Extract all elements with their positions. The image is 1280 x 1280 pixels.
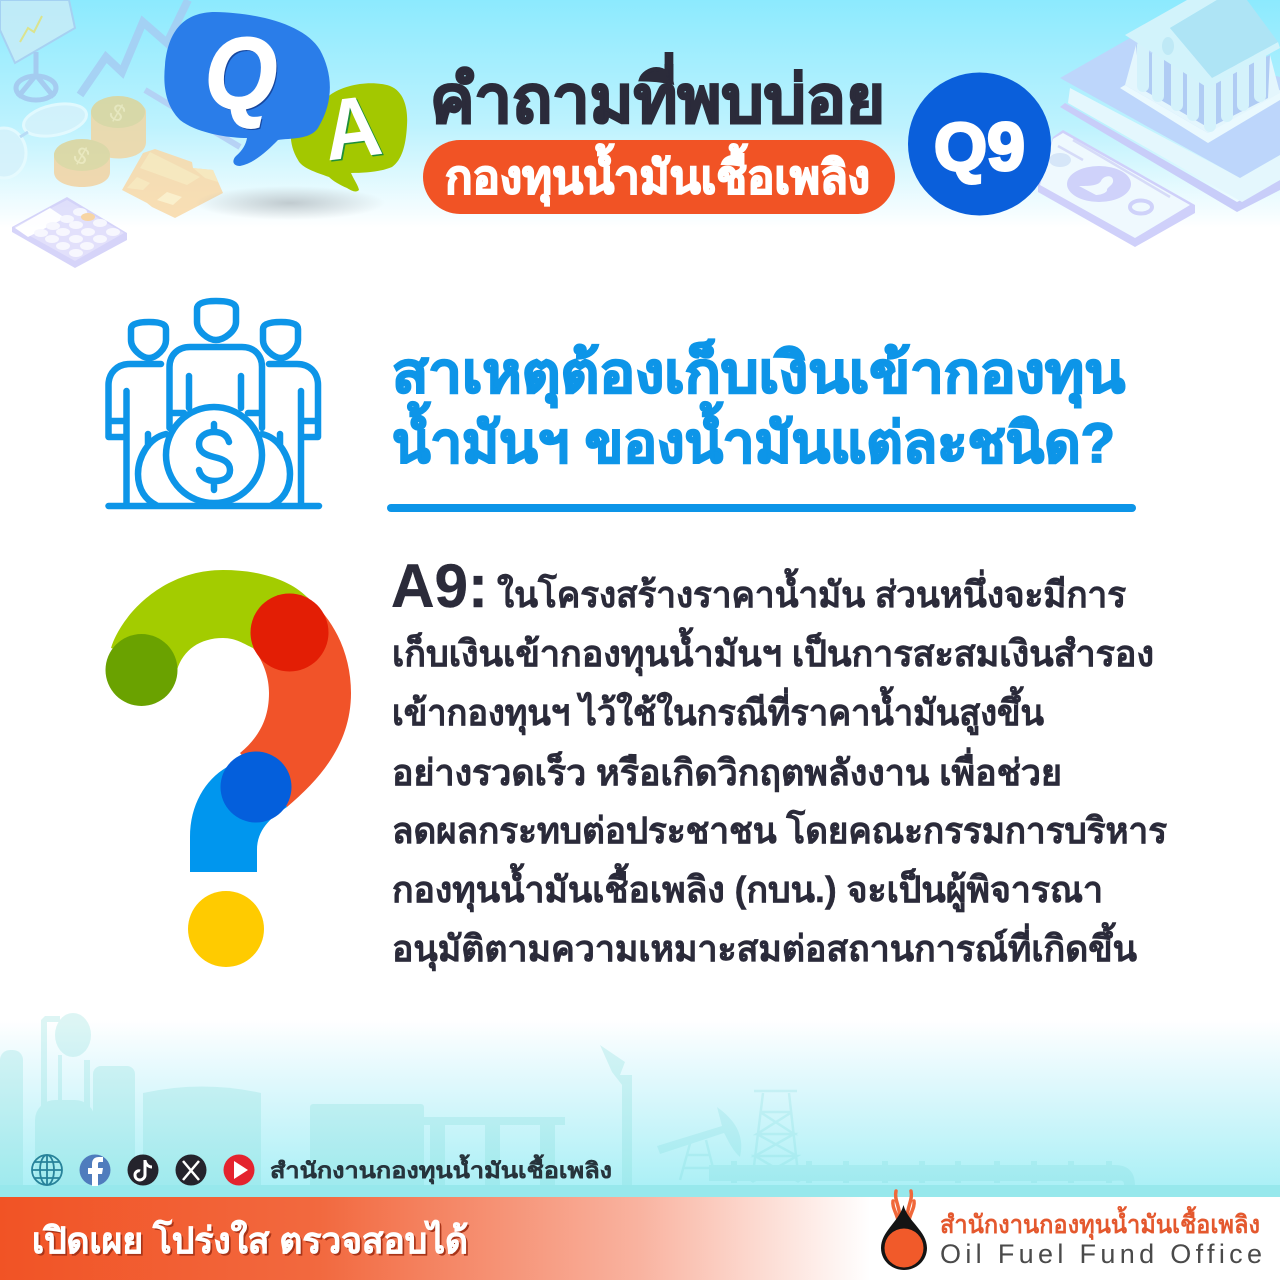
Q bubble: Q (207, 18, 279, 132)
footer band (0, 1197, 1280, 1280)
icon: facebook (80, 1154, 110, 1186)
slogan: เปิดเผย โปร่งใส ตรวจสอบได้ (32, 1219, 468, 1261)
coin stacks (54, 96, 146, 187)
banknote (1038, 130, 1195, 247)
question heading: สาเหตุต้องเก็บเงินเข้ากองทุน (392, 338, 1125, 408)
A bubble: A (320, 77, 388, 180)
logo: oil drop with flames (881, 1191, 927, 1270)
A bubble: A (318, 76, 387, 179)
calculator (12, 197, 127, 268)
answer text: อย่างรวดเร็ว หรือเกิดวิกฤตพลังงาน เพื่อช่วย (392, 747, 1062, 793)
icon: tiktok (128, 1154, 158, 1186)
logo text (940, 1205, 1262, 1269)
icon: globe (32, 1155, 62, 1185)
icon: people with money (108, 301, 319, 506)
header illustration: bank and banknote right (1038, 0, 1280, 247)
subtitle pill: กองทุนน้ำมันเชื้อเพลิง (445, 143, 870, 206)
Q bubble (164, 12, 330, 166)
answer text: ในโครงสร้างราคาน้ำมัน ส่วนหนึ่งจะมีการ (497, 568, 1127, 615)
footer background (0, 1020, 1280, 1197)
bank platform (1060, 38, 1280, 212)
gold bars (122, 149, 223, 218)
social handle text: สำนักงานกองทุนน้ำมันเชื้อเพลิง (270, 1154, 612, 1185)
social icons row (32, 1154, 254, 1186)
Q9 badge (908, 72, 1051, 216)
question heading (392, 338, 1125, 474)
easel chart (0, 0, 75, 100)
header background (0, 0, 1280, 228)
document edge (145, 90, 240, 147)
bank columns (1143, 46, 1260, 126)
logo text: สำนักงานกองทุนน้ำมันเชื้อเพลิง (940, 1205, 1260, 1241)
glasses (0, 99, 89, 178)
footer ground strip (0, 1185, 1280, 1197)
answer text: ลดผลกระทบต่อประชาชน โดยคณะกรรมการบริหาร (392, 809, 1168, 851)
icon: colourful question mark (106, 570, 351, 967)
answer text: กองทุนน้ำมันเชื้อเพลิง (กบน.) จะเป็นผู้พิจารณา (392, 863, 1103, 913)
answer text (391, 552, 1168, 972)
logo text: Oil Fuel Fund Office (940, 1239, 1262, 1269)
subtitle pill (423, 140, 895, 214)
bank roof (1125, 0, 1280, 88)
line chart ribbon (80, 0, 188, 95)
footer silhouette: refinery (0, 1013, 632, 1197)
A bubble (291, 76, 407, 191)
title: คำถามที่พบบ่อย (430, 52, 885, 136)
coin stacks: $ (69, 141, 94, 171)
answer text: เก็บเงินเข้ากองทุนน้ำมันฯ เป็นการสะสมเงินสำรอง (392, 627, 1154, 677)
header illustration: finance objects left (0, 0, 240, 268)
answer label A9: A9: (391, 552, 488, 620)
footer silhouette: oil field and pipeline (657, 1091, 1135, 1185)
Q9 badge: Q9 (934, 109, 1025, 185)
icon: X (176, 1154, 206, 1186)
slogan: เปิดเผย โปร่งใส ตรวจสอบได้ (34, 1221, 470, 1263)
Q bubble: Q (205, 16, 277, 130)
question heading: น้ำมันฯ ของน้ำมันแต่ละชนิด? (392, 402, 1115, 474)
Q and A speech bubbles (164, 12, 407, 220)
heading underline (387, 504, 1136, 512)
answer text: เข้ากองทุนฯ ไว้ใช้ในกรณีที่ราคาน้ำมันสูงขึ้น (392, 686, 1044, 736)
icon: youtube (224, 1154, 254, 1186)
coin stacks: $ (105, 98, 130, 128)
answer text: อนุมัติตามความเหมาะสมต่อสถานการณ์ที่เกิดขึ้น (392, 922, 1137, 972)
